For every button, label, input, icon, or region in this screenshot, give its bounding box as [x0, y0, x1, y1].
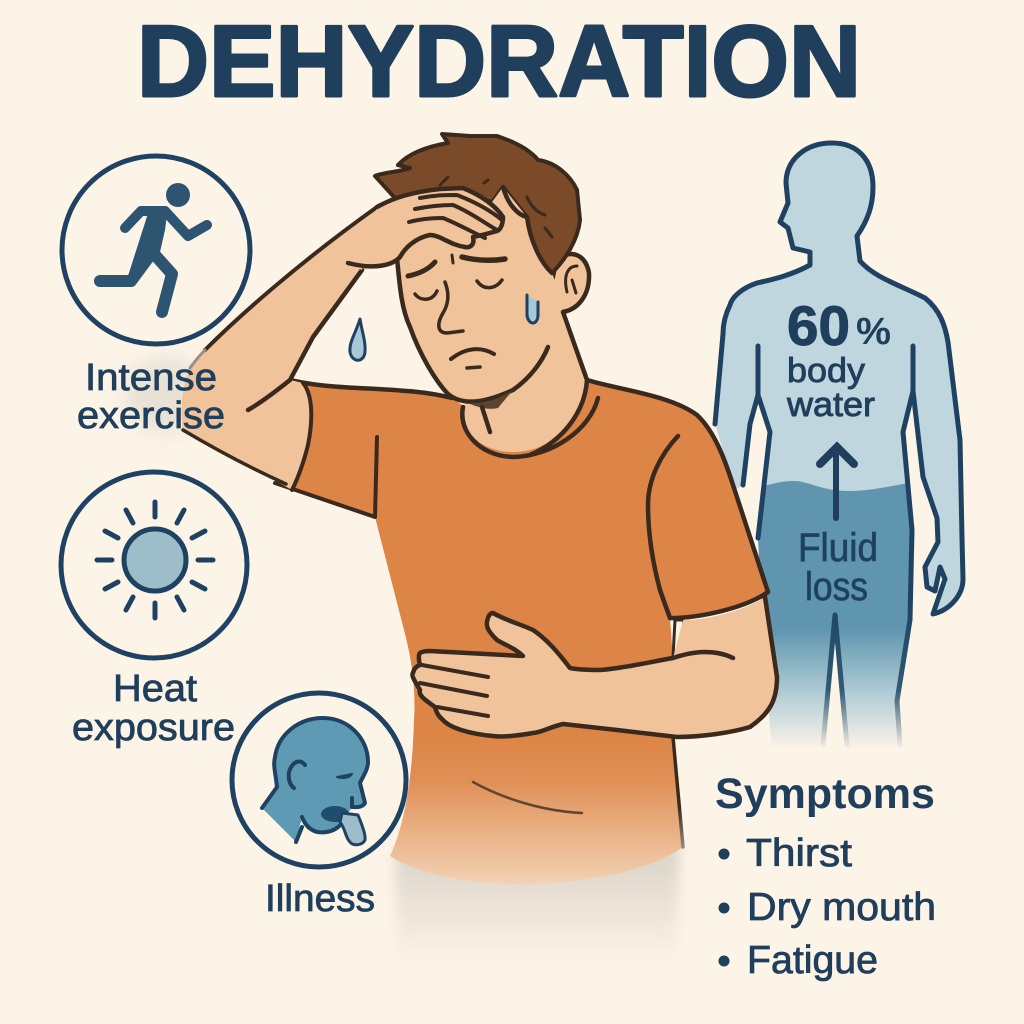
icon: runner — [100, 183, 207, 312]
hair details — [440, 177, 552, 237]
panel: body water silhouette — [715, 143, 963, 760]
panel: dehydrated person — [182, 134, 777, 884]
smudge behind elbow — [125, 357, 205, 433]
shirt — [275, 380, 768, 884]
hair — [375, 134, 580, 273]
facial features — [408, 255, 505, 368]
60% body water label: water — [786, 386, 875, 424]
panel: illness — [232, 693, 406, 920]
silhouette fill — [715, 143, 963, 750]
hair edge — [503, 187, 587, 380]
sleeve hem — [660, 590, 768, 618]
60% body water label — [786, 294, 891, 424]
label: Heat — [113, 668, 197, 710]
label — [72, 668, 235, 749]
panel: heat exposure — [61, 472, 247, 749]
label: Illness — [265, 878, 375, 920]
title: DEHYDRATION — [137, 6, 861, 118]
icon: sick head — [262, 718, 368, 845]
fluid loss label — [798, 526, 878, 609]
60% body water label: body — [787, 352, 865, 390]
sweat drop on face — [527, 295, 538, 323]
symptom list: Dry mouth — [747, 886, 936, 929]
panel: symptoms — [715, 770, 936, 982]
hand on forehead — [348, 188, 503, 270]
face outline — [397, 258, 548, 402]
label — [77, 357, 225, 437]
circle — [62, 156, 250, 344]
face — [397, 187, 563, 402]
water level fill — [758, 481, 910, 750]
symptom list — [718, 832, 936, 982]
circle — [232, 693, 406, 867]
falling drop — [350, 319, 365, 360]
silhouette outline — [715, 143, 963, 745]
fluid loss label: loss — [805, 565, 868, 609]
circle — [61, 472, 247, 658]
label: Intense — [85, 357, 217, 399]
arrow: up — [820, 447, 854, 518]
neck — [463, 320, 587, 452]
60% body water label: % — [856, 311, 891, 353]
icon: sun — [97, 502, 213, 618]
label: exposure — [72, 707, 235, 749]
lower right gap — [673, 620, 692, 657]
chin shadow — [470, 390, 513, 409]
fluid loss label: Fluid — [798, 526, 878, 570]
symptom list: Fatigue — [747, 939, 878, 982]
panel: intense exercise — [62, 156, 250, 437]
arm across belly — [412, 597, 777, 737]
ear — [548, 254, 589, 312]
heading: Symptoms — [715, 770, 935, 818]
shadow under shirt — [395, 845, 680, 960]
60% body water label: 60 — [787, 294, 850, 357]
raised arm — [182, 188, 503, 490]
ear detail — [566, 266, 577, 293]
label: exercise — [77, 395, 225, 437]
collar — [462, 380, 598, 457]
symptom list: Thirst — [746, 832, 852, 875]
